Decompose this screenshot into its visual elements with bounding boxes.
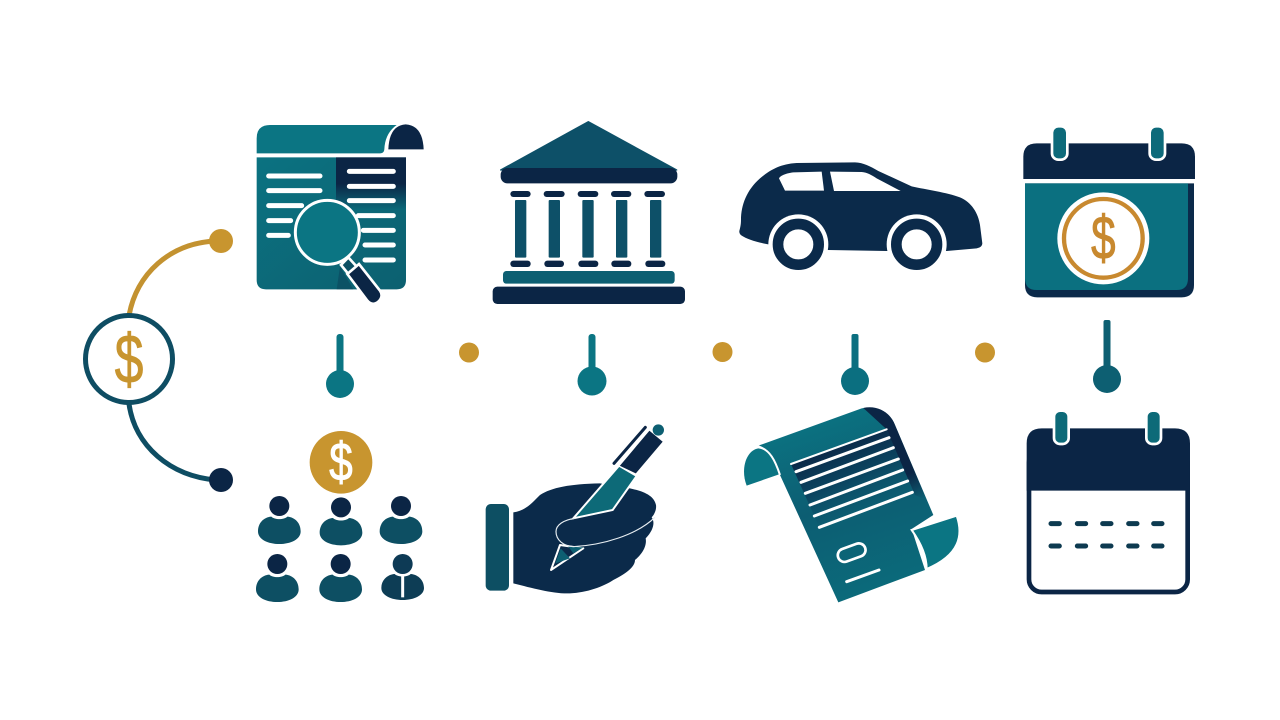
person 3 [380,496,422,544]
dollar hub circle: $ [115,320,143,399]
icon: hand signing with pen [486,424,664,593]
dot 2 [712,342,732,362]
person 5 [319,554,362,602]
dot 1 [459,342,479,362]
marker 1 [326,334,354,398]
person 1 [258,496,301,544]
icon: calendar with dollar coin [1023,126,1195,297]
person 2 [320,497,362,545]
icon: document with magnifier [257,124,424,304]
icon: calendar with dollar coin: $ [1091,205,1116,273]
person 6 [381,554,424,600]
marker 3 [841,334,869,395]
timeline markers and dots [326,320,1121,398]
dot 3 [975,342,995,362]
marker 4 [1093,320,1121,393]
icon: contract scroll [744,407,959,602]
connector arc: navy [129,404,233,492]
icon: people group with dollar coin [256,431,424,602]
connector arc: gold [129,229,233,316]
icon: bank building [493,122,685,304]
marker 2 [578,334,606,396]
icon: car [739,162,982,278]
icon: blank calendar [1027,411,1190,592]
coin [310,431,372,494]
person 4 [256,554,299,602]
central dollar hub with connector arcs [86,229,233,492]
dollar hub circle [86,316,172,402]
coin: $ [329,433,353,493]
